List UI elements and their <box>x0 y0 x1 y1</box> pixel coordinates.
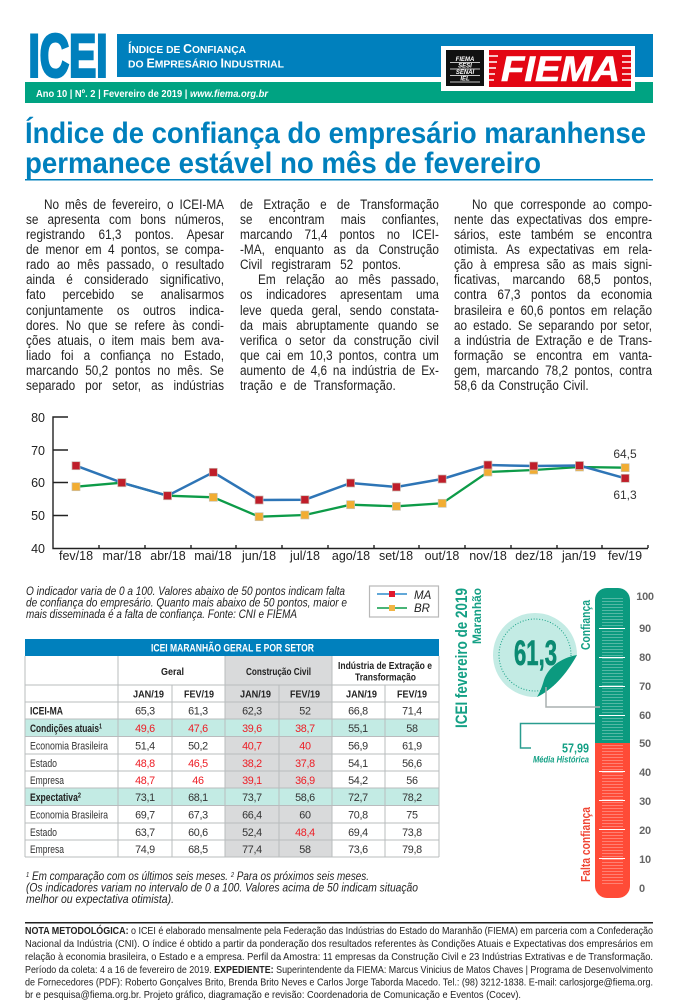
row: Estado: 48,8 <box>135 758 155 770</box>
chart note: mais disseminada é a falta de confiança. Fonte: CNI e FIEMA <box>26 607 297 621</box>
row: Economia Brasileira: 61,9 <box>402 740 422 752</box>
row: Empresa: 48,7 <box>135 775 155 787</box>
row: Economia Brasileira: 56,9 <box>348 740 368 752</box>
article column 2: da mais abruptamente quando se <box>240 318 439 333</box>
article column 3: a indústria de Extração e de Trans- <box>454 333 652 348</box>
column headings <box>133 661 432 700</box>
article column 3: formação se encontra em vanta- <box>454 348 652 363</box>
row: Empresa expectativa <box>30 844 422 856</box>
gauge scale numbers: 100 <box>636 591 654 603</box>
row: Expectativa: 78,2 <box>402 792 422 804</box>
header subtitle: ÍNDICE DE CONFIANÇA <box>128 41 246 56</box>
row: Empresa: 36,9 <box>295 775 315 787</box>
row: Economia Brasileira: Economia Brasileira <box>30 740 108 752</box>
article column 2: Em relação ao mês passado, <box>258 272 439 287</box>
header banner <box>25 22 653 103</box>
label confianca: Confiança <box>579 599 593 650</box>
historical average label <box>533 742 589 766</box>
row: Condições atuais: 58 <box>406 723 418 735</box>
row: Empresa expectativa: 77,4 <box>242 844 262 856</box>
gauge bar <box>595 588 630 898</box>
row: Estado expectativa: 48,4 <box>295 827 315 839</box>
row: Condições atuais: 47,6 <box>188 723 208 735</box>
article column 2 <box>240 197 439 393</box>
row: Economia Brasileira expectativa: Economia Brasileira <box>30 810 108 822</box>
FIEMA logo: FIEMA <box>456 57 474 63</box>
month labels: fev/19 <box>608 549 642 563</box>
chart note <box>26 584 347 621</box>
row: Empresa expectativa: 73,6 <box>348 844 368 856</box>
row: Condições atuais: 38,7 <box>295 723 315 735</box>
column headings: JAN/19 <box>346 690 377 700</box>
main title <box>25 116 646 180</box>
month labels: mai/18 <box>194 549 232 563</box>
article column 2: -MA, enquanto as da Construção <box>240 242 439 257</box>
gauge scale numbers <box>636 591 654 895</box>
thermometer gauge <box>452 588 654 898</box>
table footnotes <box>26 869 418 906</box>
column headings: FEV/19 <box>184 690 214 700</box>
article column 2: aumento de 4,6 na indústria de Ex- <box>240 363 439 378</box>
row: Expectativa: Expectativa <box>30 792 90 804</box>
article column 3: otimista. As expectativas em rela- <box>454 242 652 257</box>
gauge scale numbers: 60 <box>639 710 651 722</box>
row: Estado expectativa: 73,8 <box>402 827 422 839</box>
table footnotes: Para os próximos seis meses. <box>234 869 369 883</box>
row: Expectativa: 68,1 <box>188 792 208 804</box>
month labels <box>59 549 642 563</box>
table <box>25 639 439 857</box>
article column 1: registrando 61,3 pontos. Apesar <box>26 227 224 242</box>
article column 1: conjuntamente os outros indica- <box>26 303 224 318</box>
row: Estado: 37,8 <box>295 758 315 770</box>
row: Empresa expectativa: 68,5 <box>188 844 208 856</box>
gauge scale numbers: 10 <box>639 854 651 866</box>
column headings: JAN/19 <box>240 690 271 700</box>
gauge scale numbers: 70 <box>639 681 651 693</box>
article column 1: dores. No que se refere às condi- <box>26 318 224 333</box>
column headings: JAN/19 <box>133 690 164 700</box>
row: Expectativa: 73,1 <box>135 792 155 804</box>
row: Expectativa: 58,6 <box>295 792 315 804</box>
chart note: de confiança do empresário. Quanto mais abaixo de 50 pontos, maior e <box>26 596 347 610</box>
value badge: 61,3 <box>514 634 557 673</box>
row: Economia Brasileira: 40,7 <box>242 740 262 752</box>
gauge side subtitle: Maranhão <box>470 588 484 644</box>
article column 1: marcando 50,2 pontos no mês. Se <box>26 363 224 378</box>
article column 1: separado por setor, as indústrias <box>26 378 224 393</box>
issue line: Ano 10 | Nº. 2 | Fevereiro de 2019 | www.fiema.org.br <box>36 89 269 100</box>
row: Condições atuais: 39,6 <box>242 723 262 735</box>
article column 2: se encontram mais confiantes, <box>240 212 439 227</box>
y axis labels: 80 <box>31 411 45 425</box>
month labels: jun/18 <box>241 549 276 563</box>
row: Expectativa: 73,7 <box>242 792 262 804</box>
end value labels: 61,3 <box>613 488 637 502</box>
month labels: mar/18 <box>103 549 141 563</box>
connector: historical average <box>520 724 595 748</box>
row: ICEI-MA: 61,3 <box>188 706 208 718</box>
legend: MA <box>414 590 432 602</box>
table footnotes: 2 <box>230 872 234 879</box>
row: Economia Brasileira: 51,4 <box>135 740 155 752</box>
row: Empresa <box>30 775 418 787</box>
article column 3: nente das expectativas dos empre- <box>454 212 652 227</box>
row: Economia Brasileira expectativa: 75 <box>406 810 418 822</box>
row: Economia Brasileira: 50,2 <box>188 740 208 752</box>
row: ICEI-MA <box>30 706 422 718</box>
row: ICEI-MA: ICEI-MA <box>30 706 63 718</box>
column headings: FEV/19 <box>397 690 427 700</box>
article column 1: liado foi a confiança no Estado, <box>26 348 224 363</box>
historical average label: Média Histórica <box>533 754 589 766</box>
connector: current value <box>546 687 600 707</box>
column headings: Geral <box>161 667 184 678</box>
article column 3: ficativas, marcando 68,5 pontos, <box>454 272 652 287</box>
article column 3: contra 67,3 pontos da economia <box>454 287 652 302</box>
article column 1: fato percebido se analisarmos <box>26 287 224 302</box>
month labels: ago/18 <box>332 549 370 563</box>
month labels: dez/18 <box>515 549 553 563</box>
end value labels <box>613 447 637 502</box>
y axis labels: 50 <box>31 509 45 523</box>
row: Estado: 38,2 <box>242 758 262 770</box>
row: Economia Brasileira expectativa: 67,3 <box>188 810 208 822</box>
row: Economia Brasileira <box>30 740 422 752</box>
row: Expectativa <box>30 792 422 804</box>
chart note: O indicador varia de 0 a 100. Valores abaixo de 50 pontos indicam falta <box>26 584 345 598</box>
article column 3: sários, este também se encontra <box>454 227 652 242</box>
article column 3: ção à empresa são as mais signi- <box>454 257 652 272</box>
row: Empresa expectativa: 58 <box>299 844 311 856</box>
value badge <box>493 613 580 700</box>
article column 2: que cai em 10,3 pontos, contra um <box>240 348 439 363</box>
table header bar: ICEI MARANHÃO GERAL E POR SETOR <box>151 642 314 654</box>
chart axes <box>53 417 648 548</box>
row: ICEI-MA: 66,8 <box>348 706 368 718</box>
article column 2: tração e de Transformação. <box>240 378 396 393</box>
end value labels: 64,5 <box>613 447 637 461</box>
row: Empresa: 54,2 <box>348 775 368 787</box>
row: Expectativa: 2 <box>78 792 81 800</box>
table footnotes: Em comparação com os últimos seis meses. <box>29 869 231 883</box>
gauge scale numbers: 80 <box>639 652 651 664</box>
historical average label: 57,99 <box>562 742 589 756</box>
table footnotes: 1 <box>26 872 29 879</box>
row: Estado: 54,1 <box>348 758 368 770</box>
article column 1: de menor em 4 pontos, se compa- <box>26 242 224 257</box>
row: Estado expectativa: 69,4 <box>348 827 368 839</box>
gauge scale numbers: 20 <box>639 825 651 837</box>
FIEMA logo: SENAI <box>456 70 474 76</box>
article column 2: marcando 71,4 pontos no ICEI- <box>240 227 439 242</box>
main title: permanece estável no mês de fevereiro <box>25 147 541 180</box>
column headings: Indústria de Extração e <box>338 661 432 672</box>
article column 1: se apresenta com bons números, <box>26 212 224 227</box>
table footnotes: melhor ou expectativa otimista). <box>26 892 174 906</box>
line chart <box>31 411 648 563</box>
article column 3: 58,6 da Construção Civil. <box>454 378 589 393</box>
month labels: set/18 <box>379 549 413 563</box>
header subtitle <box>128 41 285 70</box>
row: Condições atuais: 49,6 <box>135 723 155 735</box>
label falta confianca: Falta confiança <box>579 806 593 882</box>
article column 2: verifica o setor da construção civil <box>240 333 439 348</box>
y axis labels: 60 <box>31 476 45 490</box>
article column 3 <box>454 197 652 393</box>
gauge scale numbers: 40 <box>639 767 651 779</box>
article column 1 <box>26 197 224 393</box>
y axis labels: 70 <box>31 444 45 458</box>
month labels: abr/18 <box>150 549 186 563</box>
MA series <box>72 461 629 504</box>
row: Condições atuais <box>30 723 418 735</box>
article column 2: de Extração e de Transformação <box>240 197 439 212</box>
row: Empresa expectativa: 74,9 <box>135 844 155 856</box>
article column 3: ao estado. Se separando por setor, <box>454 318 652 333</box>
row: Estado expectativa: Estado <box>30 827 57 839</box>
row: Empresa: 56 <box>406 775 418 787</box>
main title: Índice de confiança do empresário maranhense <box>25 116 646 150</box>
gauge scale numbers: 50 <box>639 738 651 750</box>
article column 1: ainda é considerado significativo, <box>26 272 224 287</box>
row: Estado: 56,6 <box>402 758 422 770</box>
column headings: Transformação <box>355 672 416 684</box>
FIEMA logo: FIEMA <box>501 50 620 89</box>
row: Empresa: Empresa <box>30 775 64 787</box>
row: ICEI-MA: 65,3 <box>135 706 155 718</box>
gauge scale numbers: 0 <box>639 883 645 895</box>
row: Estado expectativa <box>30 827 422 839</box>
column headings: FEV/19 <box>290 690 320 700</box>
month labels: out/18 <box>425 549 459 563</box>
legend: BR <box>414 603 430 615</box>
FIEMA logo: SESI <box>458 64 472 70</box>
row: Empresa expectativa: 79,8 <box>402 844 422 856</box>
article column 3: No que corresponde ao compo- <box>472 197 652 212</box>
row: Condições atuais: 55,1 <box>348 723 368 735</box>
column headings: Construção Civil <box>246 667 311 678</box>
row: Empresa: 39,1 <box>242 775 262 787</box>
article column 3: gem, marcando 78,2 pontos, contra <box>454 363 652 378</box>
BR series <box>72 463 629 521</box>
header subtitle: DO EMPRESÁRIO INDUSTRIAL <box>128 56 285 70</box>
row: Estado: 46,5 <box>188 758 208 770</box>
gauge scale numbers: 30 <box>639 796 651 808</box>
row: Estado <box>30 758 422 770</box>
row: Estado expectativa: 60,6 <box>188 827 208 839</box>
row: Empresa expectativa: Empresa <box>30 844 64 856</box>
FIEMA logo <box>441 46 635 91</box>
article column 2: Civil registraram 52 pontos. <box>240 257 401 272</box>
month labels: jul/18 <box>289 549 320 563</box>
table footnotes: (Os indicadores variam no intervalo de 0 a 100. Valores acima de 50 indicam situação <box>26 880 418 894</box>
y axis labels: 40 <box>31 542 45 556</box>
row: Economia Brasileira expectativa: 60 <box>299 810 311 822</box>
row: ICEI-MA: 62,3 <box>242 706 262 718</box>
row: ICEI-MA: 71,4 <box>402 706 422 718</box>
article column 2: os indicadores apresentam uma <box>240 287 439 302</box>
table header bar <box>25 639 439 656</box>
gauge scale numbers: 90 <box>639 623 651 635</box>
legend <box>370 586 438 617</box>
article column 1: ções atuais, o item mais bem ava- <box>26 333 224 348</box>
row: Condições atuais: Condições atuais <box>30 723 119 735</box>
row: Estado expectativa: 52,4 <box>242 827 262 839</box>
row: Economia Brasileira expectativa: 70,8 <box>348 810 368 822</box>
row: Economia Brasileira expectativa: 69,7 <box>135 810 155 822</box>
row: ICEI-MA: 52 <box>299 706 311 718</box>
month labels: jan/19 <box>561 549 596 563</box>
FIEMA logo: IEL <box>460 76 470 82</box>
row: Economia Brasileira: 40 <box>299 740 311 752</box>
row: Condições atuais: 1 <box>99 724 102 730</box>
gauge side title: ICEI fevereiro de 2019 <box>452 588 471 728</box>
row: Expectativa: 72,7 <box>348 792 368 804</box>
logo ICEI: ICEI <box>28 22 108 90</box>
row: Estado: Estado <box>30 758 57 770</box>
article column 3: brasileira e 60,6 pontos em relação <box>454 303 652 318</box>
month labels: nov/18 <box>469 549 507 563</box>
row: Economia Brasileira expectativa: 66,4 <box>242 810 262 822</box>
article column 1: No mês de fevereiro, o ICEI-MA <box>44 197 224 212</box>
methodology note <box>25 922 653 1000</box>
article column 1: rado ao mês passado, o resultado <box>26 257 224 272</box>
y axis labels <box>31 411 45 556</box>
row: Empresa: 46 <box>192 775 204 787</box>
month labels: fev/18 <box>59 549 93 563</box>
row: Economia Brasileira expectativa <box>30 810 418 822</box>
row: Estado expectativa: 63,7 <box>135 827 155 839</box>
article column 2: leve queda geral, sendo constata- <box>240 303 439 318</box>
